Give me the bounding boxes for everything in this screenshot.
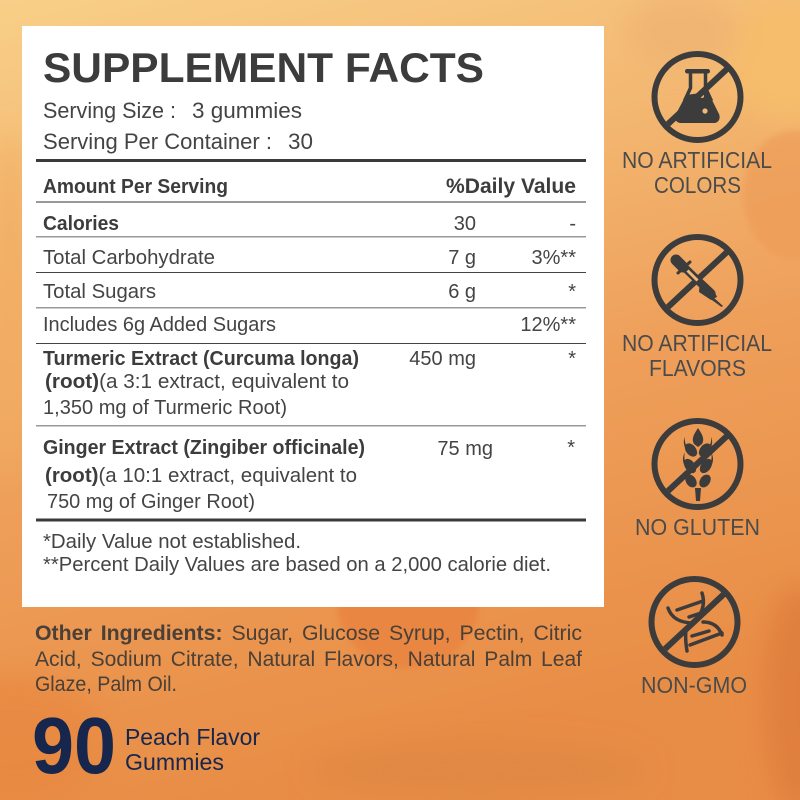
other ingredients xyxy=(35,622,582,696)
serving size: Serving Size : xyxy=(43,98,176,123)
label: no gluten: NO GLUTEN xyxy=(635,514,760,540)
row: ginger extract: * xyxy=(567,437,575,459)
row: total carbohydrate: 3%** xyxy=(532,247,576,269)
count: 90: 90 xyxy=(32,701,116,790)
footnotes xyxy=(43,531,551,576)
flavor label: Gummies xyxy=(125,749,224,775)
row: turmeric extract: Turmeric Extract (Curcuma longa) xyxy=(43,348,359,370)
row: total carbohydrate: Total Carbohydrate xyxy=(43,247,215,269)
servings per container: 30 xyxy=(288,129,313,154)
row: ginger extract: (root)(a 10:1 extract, equivalent to xyxy=(45,465,357,487)
row: calories xyxy=(43,213,576,235)
row: total carbohydrate xyxy=(43,247,576,269)
row: ginger extract: 75 mg xyxy=(437,438,493,460)
label: no artificial flavors xyxy=(622,330,772,381)
table header xyxy=(43,175,576,198)
row: turmeric extract: (root)(a 3:1 extract, equivalent to xyxy=(45,371,349,393)
footnotes: *Daily Value not established. xyxy=(43,531,301,553)
label: no artificial flavors: NO ARTIFICIAL xyxy=(622,330,772,356)
row: ginger extract: Ginger Extract (Zingiber officinale) xyxy=(43,437,365,459)
row: turmeric extract xyxy=(43,348,576,419)
other ingredients: Acid, Sodium Citrate, Natural Flavors, Natural Palm Leaf xyxy=(35,648,582,671)
row: turmeric extract: 450 mg xyxy=(409,348,476,370)
table header: Amount Per Serving xyxy=(43,176,228,198)
icon: no artificial flavors xyxy=(654,237,740,323)
row: total sugars: 6 g xyxy=(448,281,476,303)
row: total sugars: Total Sugars xyxy=(43,281,156,303)
flavor label: Peach Flavor xyxy=(125,724,260,750)
label: no artificial colors: COLORS xyxy=(654,172,741,198)
row: added sugars: Includes 6g Added Sugars xyxy=(43,314,276,336)
serving size xyxy=(43,98,302,123)
row: total sugars: * xyxy=(568,281,576,303)
label: no artificial colors xyxy=(622,147,772,198)
row: total carbohydrate: 7 g xyxy=(448,247,476,269)
label: no artificial flavors: FLAVORS xyxy=(649,355,746,381)
row: calories: 30 xyxy=(454,213,476,235)
row: calories: - xyxy=(569,213,576,235)
servings per container: Serving Per Container : xyxy=(43,129,272,154)
icon: no artificial colors xyxy=(654,54,740,140)
serving size: 3 gummies xyxy=(192,98,302,123)
icon: non-gmo xyxy=(652,579,738,665)
panel: supplement facts xyxy=(22,26,604,607)
row: ginger extract: 750 mg of Ginger Root) xyxy=(47,491,255,513)
icon: no gluten xyxy=(654,421,740,507)
row: turmeric extract: * xyxy=(568,348,576,370)
label: non-gmo: NON-GMO xyxy=(641,672,747,698)
other ingredients: Other Ingredients: Sugar, Glucose Syrup, Pectin, Citric xyxy=(35,622,582,645)
row: total sugars xyxy=(43,281,576,303)
row: ginger extract xyxy=(43,437,575,513)
row: turmeric extract: 1,350 mg of Turmeric Root) xyxy=(43,397,287,419)
row: added sugars xyxy=(43,314,576,336)
row: added sugars: 12%** xyxy=(520,314,576,336)
flavor label xyxy=(125,724,260,775)
title: SUPPLEMENT FACTS xyxy=(43,44,484,91)
other ingredients: Glaze, Palm Oil. xyxy=(35,673,177,696)
row: calories: Calories xyxy=(43,213,119,235)
label: no artificial colors: NO ARTIFICIAL xyxy=(622,147,772,173)
table header: %Daily Value xyxy=(446,175,576,198)
footnotes: **Percent Daily Values are based on a 2,000 calorie diet. xyxy=(43,554,551,576)
